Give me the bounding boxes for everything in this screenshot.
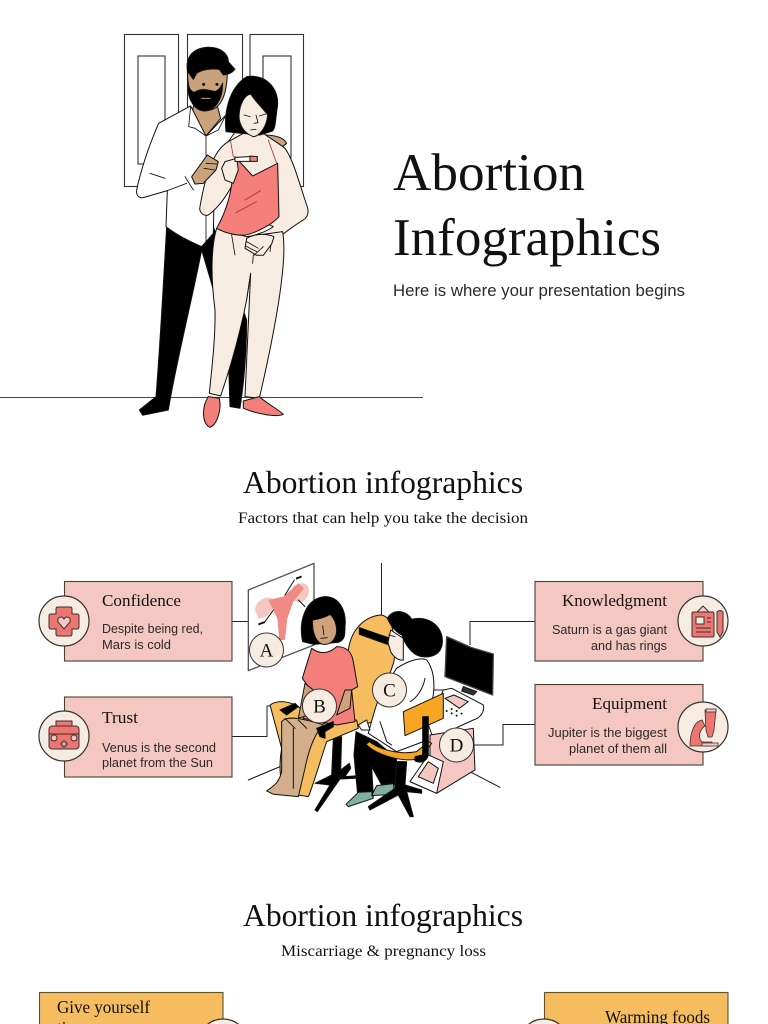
connector lines — [232, 563, 535, 745]
heading: main title: Abortion — [393, 144, 585, 202]
panel: knowledgment — [535, 582, 728, 661]
panel: give yourself time: Give yourself — [57, 997, 150, 1017]
leg rest — [270, 702, 358, 797]
panel: equipment: Equipment — [592, 694, 667, 713]
illustration: couple with pregnancy test — [0, 34, 423, 427]
panel: warming foods — [519, 992, 728, 1024]
label: A — [250, 633, 284, 667]
icon: medical cross with heart — [49, 607, 79, 636]
patient legs — [267, 718, 323, 797]
icon: clipboard and pencil — [692, 606, 723, 637]
panel: equipment: Jupiter is the biggest — [548, 726, 668, 740]
panel: confidence: Mars is cold — [102, 638, 171, 652]
man hand on woman's arm — [192, 155, 218, 184]
panel: trust: planet from the Sun — [102, 756, 213, 770]
panel: trust: Venus is the second — [102, 741, 216, 755]
woman hand holding test — [222, 158, 238, 183]
pregnancy test — [235, 157, 250, 161]
seat black straps — [280, 703, 333, 738]
woman hair — [226, 76, 278, 135]
label: D — [440, 728, 474, 762]
ultrasound console — [428, 688, 484, 738]
panel: knowledgment: Knowledgment — [562, 591, 667, 610]
man hand on shoulder — [263, 135, 287, 147]
stool — [368, 762, 422, 817]
man trousers — [139, 227, 247, 415]
icon: microscope — [690, 709, 718, 746]
woman hand on belly — [245, 234, 274, 255]
doctor face — [388, 630, 403, 660]
heading: main title: Infographics — [393, 209, 661, 267]
panel: knowledgment: and has rings — [591, 639, 667, 653]
panel: confidence: Despite being red, — [102, 622, 203, 636]
patient arms — [298, 683, 352, 718]
label: B — [302, 689, 336, 723]
icon: first aid kit — [49, 721, 79, 749]
doctor trousers — [354, 732, 397, 802]
panel: trust: Trust — [102, 708, 138, 727]
panel: confidence: Confidence — [102, 591, 181, 610]
subheading: section two: Factors that can help you take the decision — [238, 510, 528, 527]
man neck — [191, 103, 221, 136]
heading: section three: Abortion infographics — [243, 898, 523, 933]
patient hair — [301, 597, 345, 644]
doctor coat — [368, 659, 434, 752]
panel: equipment: planet of them all — [569, 742, 667, 756]
woman face — [239, 94, 268, 137]
patient dress — [302, 647, 358, 725]
heading: section two: Abortion infographics — [243, 465, 523, 500]
heading: main title — [393, 144, 661, 267]
subtitle: Here is where your presentation begins — [393, 282, 685, 300]
panel: confidence — [39, 582, 232, 661]
wall poster of uterus — [248, 563, 314, 671]
label: C — [372, 673, 406, 707]
subheading: section three: Miscarriage & pregnancy loss — [281, 943, 486, 960]
man beard — [188, 83, 223, 111]
ultrasound cart — [410, 728, 475, 793]
monitor — [445, 637, 493, 695]
panel: knowledgment: Saturn is a gas giant — [552, 623, 668, 637]
woman trousers — [209, 228, 284, 398]
label: D: D — [450, 736, 463, 756]
man shirt — [137, 106, 237, 247]
doctor hair — [387, 612, 442, 657]
man face — [187, 63, 227, 111]
patient head — [313, 614, 337, 644]
label: A: A — [260, 640, 274, 662]
chair base — [315, 737, 368, 812]
label: B: B — [313, 696, 326, 718]
doctor shoes — [346, 784, 395, 807]
panel: give yourself time — [40, 992, 248, 1024]
label: C: C — [383, 680, 396, 702]
panel: trust — [39, 697, 232, 777]
man hair — [187, 47, 235, 79]
panel: equipment — [535, 684, 728, 765]
woman top — [217, 157, 279, 235]
woman chest and arms — [200, 133, 308, 253]
illustration: ultrasound exam scene — [248, 563, 500, 817]
exam chair back — [343, 615, 395, 727]
woman shoes — [204, 397, 220, 427]
